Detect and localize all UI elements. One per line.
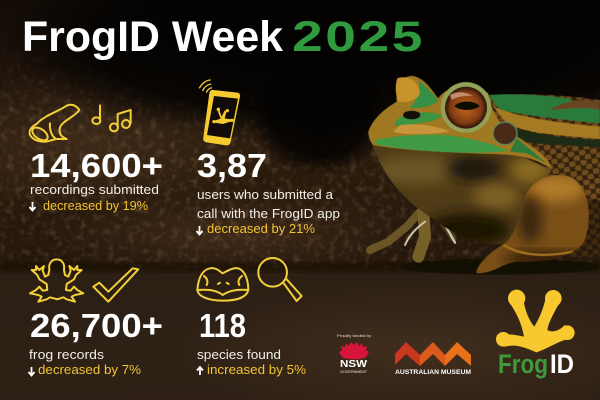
- icon: waratah: [339, 342, 369, 359]
- logo: FrogID: Frog: [498, 349, 548, 379]
- title: [22, 13, 425, 61]
- icon: phone with frog foot and signal: [199, 80, 240, 145]
- icon: down arrow: [30, 202, 36, 210]
- title: 2025: [292, 13, 425, 61]
- icon: down arrow: [28, 367, 34, 376]
- stat: app users: 3,87: [197, 147, 267, 184]
- frog back and flank: [487, 92, 600, 260]
- stat: species found: species found: [197, 348, 281, 362]
- stat: frog records: [28, 259, 163, 377]
- logo: NSW Government: Proudly funded by: [337, 333, 371, 338]
- logo: FrogID: ID: [550, 349, 574, 379]
- stat: app users: decreased by 21%: [207, 222, 315, 236]
- title: FrogID Week: [22, 13, 283, 61]
- logo: NSW Government: NSW: [340, 359, 368, 370]
- icon: down arrow: [196, 226, 202, 234]
- stat: frog records: decreased by 7%: [38, 363, 141, 377]
- stat: species found: increased by 5%: [207, 363, 306, 377]
- logo: NSW Government: GOVERNMENT: [340, 369, 368, 374]
- icon: calling frog with music notes: [30, 105, 131, 143]
- stat: species found: [197, 258, 306, 377]
- frog nostril marking: [403, 111, 420, 119]
- stat: recordings submitted: [30, 105, 163, 213]
- frog shadow: [400, 259, 600, 275]
- frog eye: [441, 82, 491, 133]
- stat: frog records: 26,700+: [30, 307, 163, 344]
- stat: recordings submitted: recordings submitted: [30, 183, 159, 197]
- frog body: [372, 144, 552, 244]
- logo: Australian Museum: AUSTRALIAN MUSEUM: [395, 369, 471, 376]
- photo: green and golden bell frog: [367, 76, 600, 277]
- frog head: [368, 76, 552, 168]
- logo: Australian Museum: [395, 342, 471, 376]
- stat: species found: 118: [199, 307, 246, 344]
- stat: recordings submitted: decreased by 19%: [43, 199, 148, 213]
- icon: up arrow: [197, 367, 203, 375]
- icon: frog face and magnifying glass: [197, 258, 302, 301]
- stat: app users: users who submitted a: [197, 188, 333, 202]
- frog eardrum: [493, 122, 517, 145]
- stat: app users: call with the FrogID app: [197, 207, 340, 221]
- icon: FrogID foot: [496, 290, 575, 352]
- logo: NSW Government: [337, 333, 371, 374]
- stat: frog records: frog records: [29, 348, 104, 362]
- icon: top-down frog and tick: [30, 259, 138, 302]
- stat: app users: [196, 80, 340, 236]
- stat: recordings submitted: 14,600+: [30, 147, 163, 184]
- logo: FrogID: [496, 290, 575, 379]
- frog hind leg: [476, 175, 589, 274]
- frog front foot: [370, 210, 455, 257]
